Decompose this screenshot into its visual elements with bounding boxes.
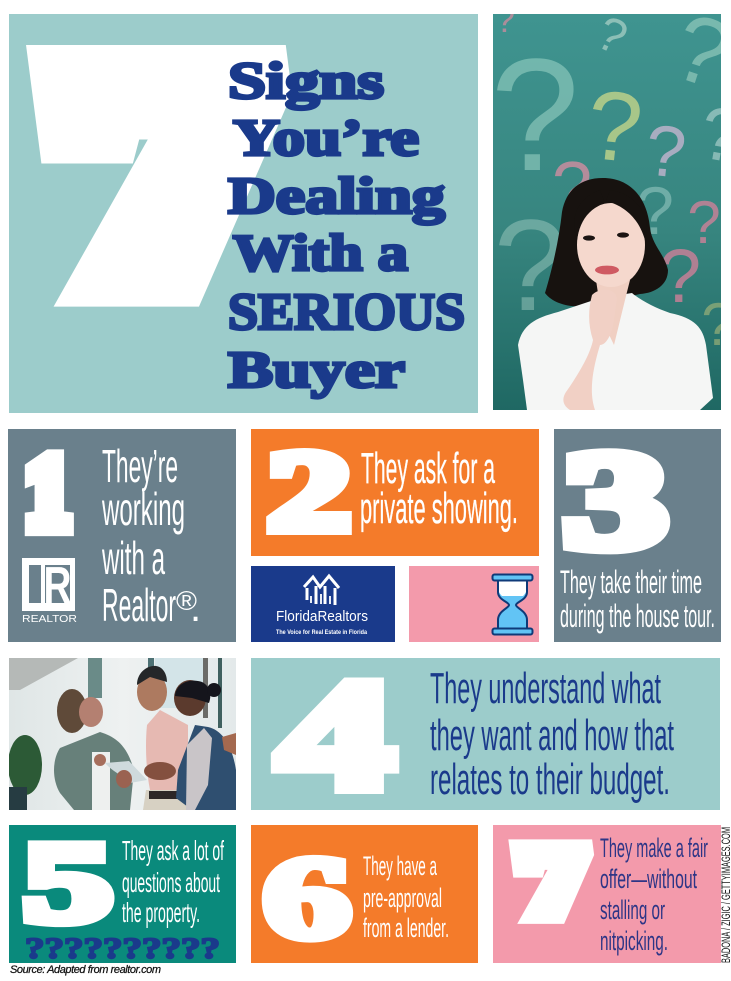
- panel: title: [9, 4, 478, 413]
- title: With a: [233, 225, 408, 282]
- text: sign 1: Realtor: [102, 579, 176, 631]
- photo: woman thinking in front of a chalkboard: ?: [687, 189, 721, 256]
- title: Dealing: [228, 168, 445, 225]
- title: [228, 53, 465, 399]
- text: sign 6: [363, 851, 449, 943]
- logo tagline: The Voice for Real Estate in Florida: [276, 630, 368, 636]
- panel: sign 4: [251, 648, 720, 822]
- panel: sign 6: [251, 825, 478, 963]
- text: sign 6: pre-approval: [363, 883, 442, 913]
- numeral 3: 3: [564, 424, 667, 576]
- numeral 2: 2: [268, 428, 351, 554]
- title: You’re: [233, 110, 419, 167]
- icon: REALTOR logo: [22, 557, 77, 625]
- text: sign 5: questions about: [122, 867, 220, 898]
- neck: [596, 280, 630, 345]
- photo: woman thinking in front of a chalkboard: ?: [491, 25, 579, 204]
- photo: woman thinking in front of a chalkboard: ?: [659, 234, 701, 319]
- panel: sign 5: [9, 820, 236, 965]
- face: [577, 203, 645, 287]
- row of question marks: ??????????: [25, 932, 220, 965]
- text: sign 1: .: [190, 586, 201, 630]
- text: sign 5: the property.: [122, 897, 200, 928]
- photo: agent with clients and tablet: [8, 658, 236, 810]
- source note: Source: Adapted from realtor.com: [10, 964, 161, 976]
- icon: REALTOR logo: REALTOR: [22, 614, 77, 625]
- title: SERIOUS: [228, 284, 465, 341]
- text: sign 2: They ask for a: [361, 444, 495, 493]
- photo: woman thinking in front of a chalkboard: ?: [494, 192, 566, 338]
- logo name: FloridaRealtors: [276, 608, 368, 625]
- panel: sign 1: [8, 429, 236, 642]
- eyes: [583, 232, 629, 241]
- numeral 4: 4: [277, 648, 394, 822]
- panel: sign 3: [554, 424, 721, 642]
- big numeral 7: 7: [39, 4, 293, 342]
- text: sign 2: [360, 444, 518, 533]
- text: sign 1: They’re: [102, 440, 178, 492]
- man in pink shirt: [137, 666, 188, 810]
- text: sign 6: from a lender.: [363, 913, 449, 943]
- numeral 7: 7: [512, 826, 594, 936]
- panel: sign 2: [251, 428, 539, 556]
- text: sign 1: with a: [101, 532, 165, 584]
- text: sign 7: nitpicking.: [600, 926, 668, 956]
- text: sign 1: [101, 440, 201, 631]
- text: sign 7: [600, 833, 708, 956]
- text: sign 4: [430, 664, 674, 804]
- text: sign 6: They have a: [363, 851, 437, 881]
- photo: woman thinking in front of a chalkboard: ?: [641, 110, 690, 194]
- text: sign 3: [560, 564, 715, 634]
- numeral 6: 6: [263, 833, 351, 962]
- text: sign 1: working: [101, 483, 185, 535]
- photo: woman thinking in front of a chalkboard: [491, 0, 731, 410]
- icon: REALTOR logo: R: [44, 557, 72, 615]
- photo: woman thinking in front of a chalkboard: ?: [588, 6, 635, 66]
- panel: hourglass: [409, 566, 539, 642]
- text: sign 7: stalling or: [600, 895, 665, 925]
- plant: [8, 735, 42, 810]
- shirt: [518, 293, 713, 410]
- fringe: [577, 203, 645, 240]
- text: sign 5: [122, 835, 224, 928]
- tablet: [94, 754, 176, 788]
- panel: Florida Realtors logo: [251, 566, 395, 642]
- photo: woman thinking in front of a chalkboard: ?: [495, 0, 515, 40]
- text: sign 1: ®: [176, 586, 197, 616]
- title: Signs: [228, 53, 384, 110]
- hair: [545, 178, 668, 306]
- panel: sign 5: They ask a lot of: [122, 835, 224, 866]
- panel: sign 2: private showing.: [360, 484, 518, 533]
- photo: woman thinking in front of a chalkboard: ?: [552, 148, 592, 228]
- icon: hourglass: [492, 574, 532, 634]
- woman with curly hair: [54, 689, 134, 810]
- title: Buyer: [228, 342, 405, 399]
- icon: houses: [304, 576, 339, 605]
- photo: woman thinking in front of a chalkboard: ?: [636, 173, 674, 249]
- woman in navy cardigan: [174, 680, 236, 810]
- hand and arm: [563, 291, 610, 410]
- photo: woman thinking in front of a chalkboard: ?: [582, 69, 647, 184]
- numeral 1: 1: [26, 437, 70, 549]
- panel: sign 7: [493, 825, 721, 963]
- numeral 5: 5: [24, 820, 112, 946]
- lips: [595, 266, 619, 274]
